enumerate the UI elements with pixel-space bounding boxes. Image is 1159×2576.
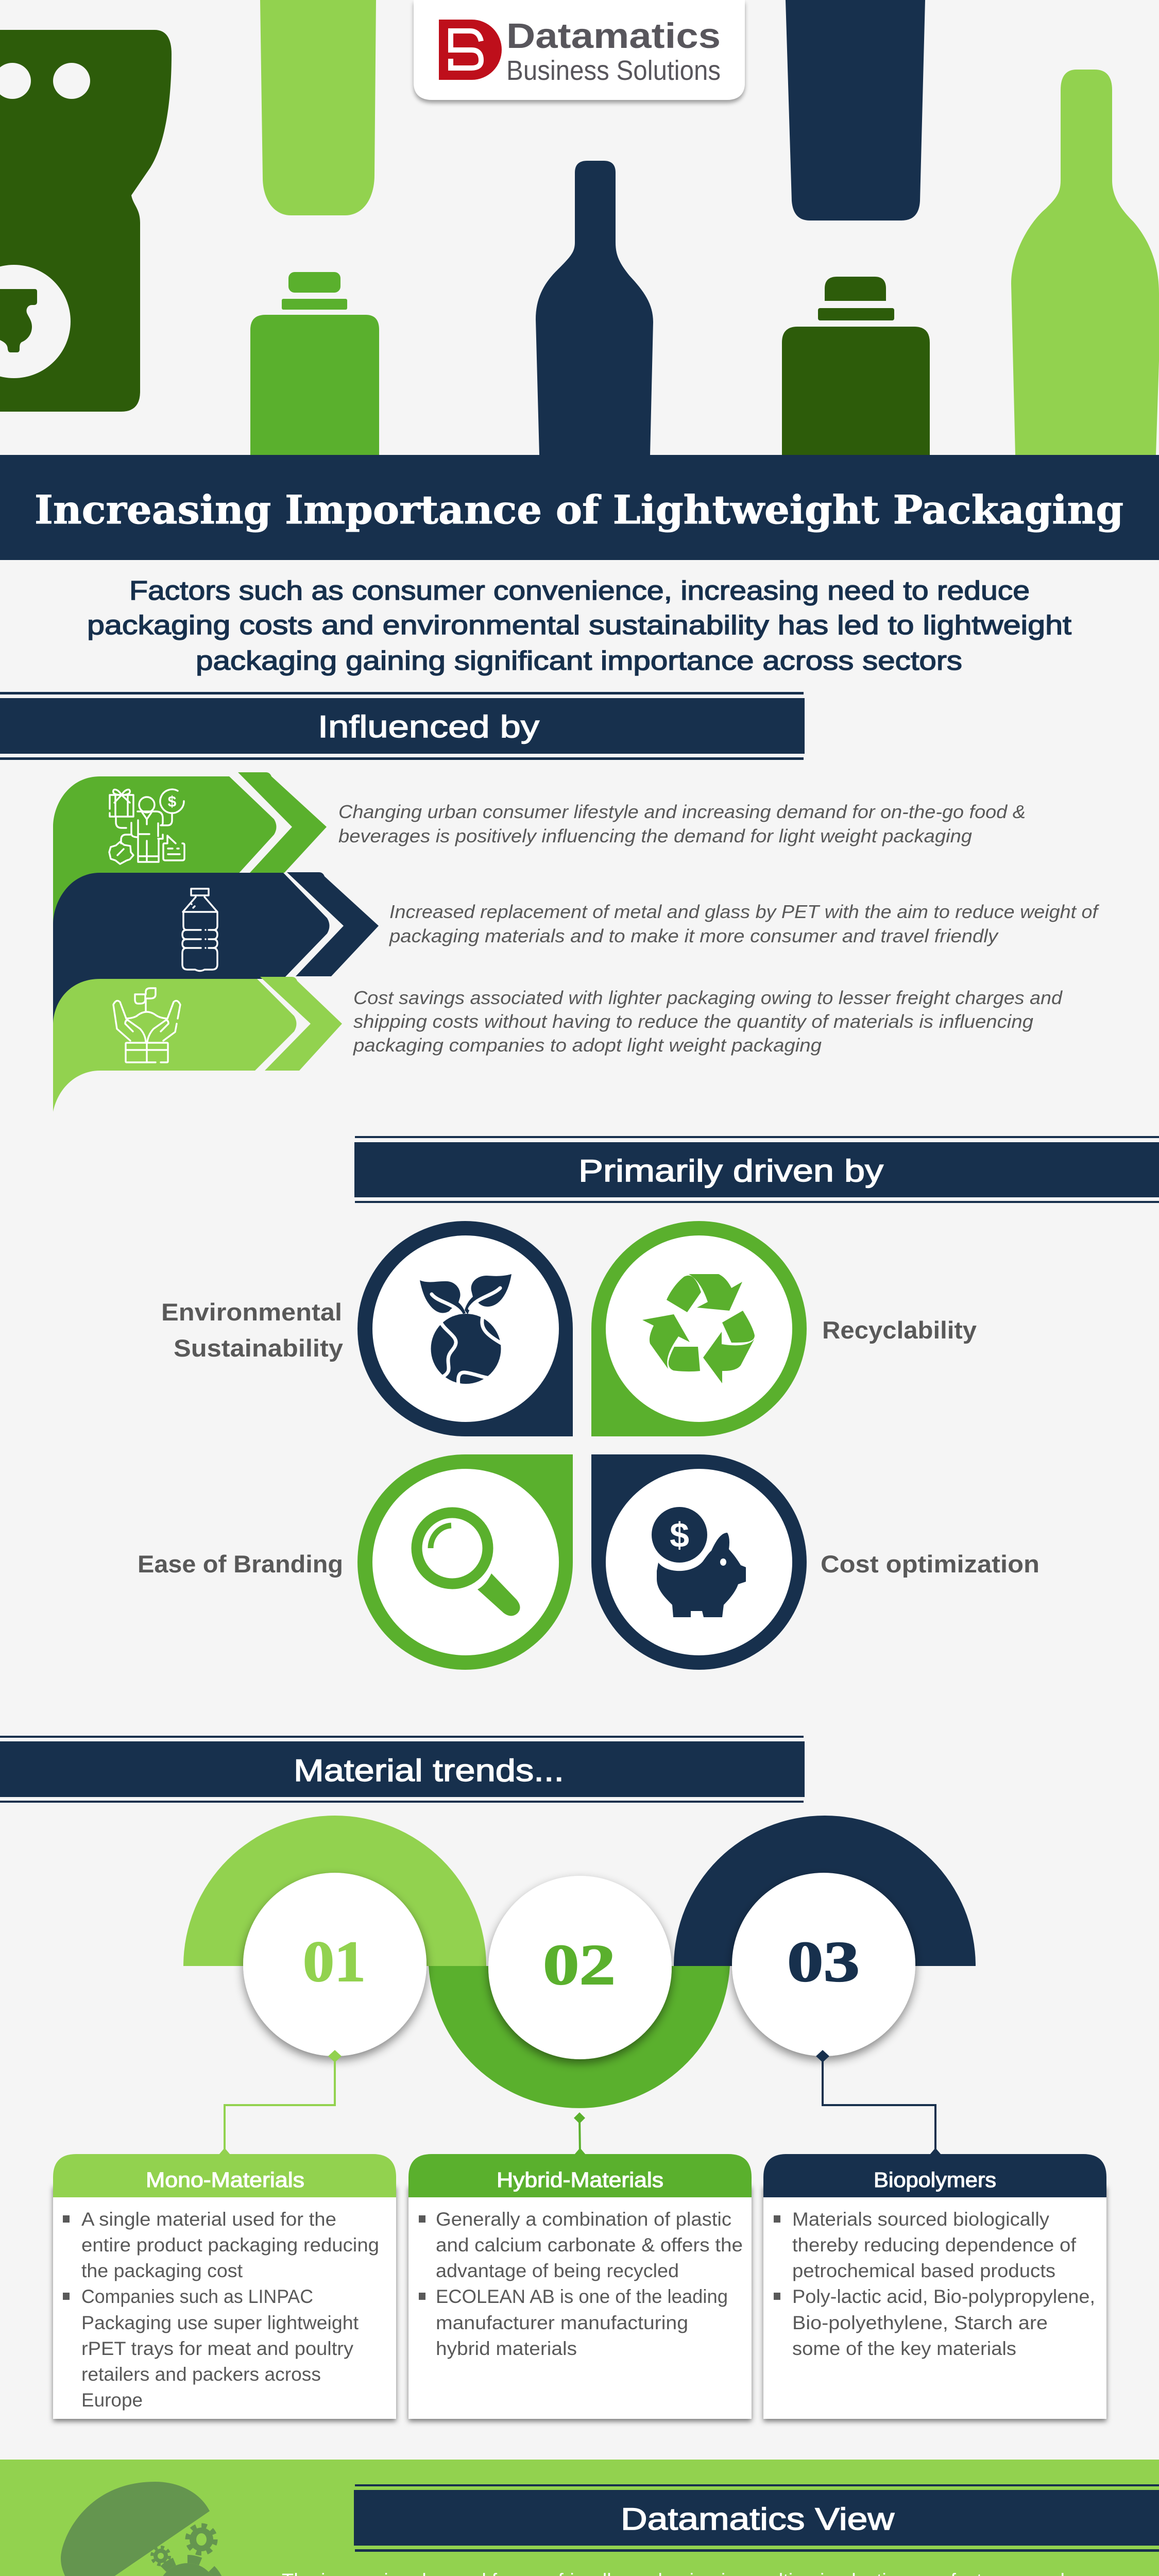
bullets: A single material used for the [81,2209,336,2230]
bullets: the packaging cost [81,2260,243,2281]
title band [0,455,1159,560]
label [161,1298,343,1362]
circle: 03 [732,1873,915,2056]
text: PET replacement: packaging materials and to make it more consumer and travel friendly [389,925,999,946]
circle: 02: 02 [543,1933,616,1997]
logo wordmark: Business Solutions [506,55,721,86]
card: mono-materials [53,2154,396,2419]
label: Sustainability [174,1334,343,1362]
bullets: some of the key materials [792,2338,1016,2359]
icon: globe with leaves [420,1274,512,1388]
icon: hands holding plant [113,988,180,1062]
arrow 3 light green [53,977,342,1112]
connector 01 [219,2050,342,2155]
bullets [63,2209,379,2411]
icon: plastic bottle [182,889,217,971]
driver: ease of branding [138,1454,573,1670]
heading: datamatics view: Datamatics View [621,2502,895,2536]
text: PET replacement: Increased replacement of metal and glass by PET with the aim to reduce weight of [389,901,1100,922]
bullets [419,2209,743,2359]
text: cost savings [353,987,1063,1056]
hero: packaging silhouettes [0,0,1159,455]
icon: green bottle [250,272,379,455]
connector 03 [816,2050,941,2155]
arrow 2 navy [53,872,379,1030]
icon: light green bottle [1011,70,1159,455]
section heading: primarily driven by: Primarily driven by [578,1154,883,1188]
icon: consumer with gift, money, discount and tag: $ [168,793,177,810]
bullets: Bio-polyethylene, Starch are [792,2312,1048,2333]
subtitle [87,576,1072,676]
label: Recyclability [822,1316,977,1344]
label: Cost optimization [821,1550,1039,1578]
arc: 03 navy [674,1816,976,1966]
icon: light green inverted bottle [260,0,376,215]
icon: piggy bank with coin: $ [670,1516,689,1555]
text: cost savings: Cost savings associated with lighter packaging owing to lesser freight charges and [353,987,1063,1008]
arrow 1 green [53,772,327,953]
icon: navy bottle [536,161,653,455]
logo wordmark: Datamatics [506,16,721,56]
circle: 01 [243,1873,427,2056]
bullets: and calcium carbonate & offers the [436,2234,743,2256]
arc: 02 green [429,1966,730,2108]
subtitle: packaging gaining significant importance across sectors [196,646,962,676]
section heading: material trends: Material trends... [294,1753,564,1788]
circle: 01: 01 [303,1930,366,1994]
panel: material trends wave [183,1816,976,2155]
card: mono-materials: Mono-Materials [146,2168,304,2192]
panel: influenced by arrows [53,772,1100,1112]
card: biopolymers [763,2154,1106,2419]
icon: logo mark [439,20,502,80]
icon: dark green bottle [782,277,930,455]
icon: recycle symbol [642,1274,755,1383]
circle: 02 [488,1876,672,2059]
connector 02 [574,2112,586,2155]
bullets: petrochemical based products [792,2260,1055,2281]
section heading: influenced by [0,692,805,760]
driver: environmental sustainability [161,1221,573,1436]
bullets: entire product packaging reducing [81,2234,379,2256]
circle: 03: 03 [787,1930,860,1994]
icon: dark green pouch [0,30,172,412]
bullets: hybrid materials [436,2338,577,2359]
logo wordmark [506,16,721,86]
text: lifestyle: beverages is positively influencing the demand for light weight packaging [338,825,972,846]
text: cost savings: shipping costs without having to reduce the quantity of materials is influencing [353,1011,1033,1032]
bullets: thereby reducing dependence of [792,2234,1077,2256]
icon: consumer with gift, money, discount and tag [109,789,184,864]
logo card [414,0,745,100]
panel: datamatics view [0,2460,1159,2576]
label: Ease of Branding [138,1550,343,1578]
bullets: Packaging use super lightweight [81,2312,359,2333]
icon: head with gears [61,2482,255,2576]
subtitle: Factors such as consumer convenience, increasing need to reduce [129,576,1030,606]
section heading: influenced by: Influenced by [318,709,539,744]
driver: cost optimization [591,1454,1039,1670]
bullets: Europe [81,2389,143,2411]
bullets: retailers and packers across [81,2364,321,2385]
title band: Increasing Importance of Lightweight Packaging [35,487,1123,533]
subtitle: packaging costs and environmental sustainability has led to lightweight [87,611,1072,640]
bullets: Poly-lactic acid, Bio-polypropylene, [792,2286,1095,2307]
text: lifestyle [338,801,1026,846]
arc: 01 light green [183,1816,486,1966]
section heading: material trends [0,1736,805,1803]
bullets: ECOLEAN AB is one of the leading [436,2286,728,2307]
label: Environmental [161,1298,342,1326]
card: hybrid-materials: Hybrid-Materials [497,2168,663,2192]
heading: datamatics view [354,2484,1159,2552]
text: lifestyle: Changing urban consumer lifestyle and increasing demand for on-the-go food & [338,801,1026,822]
text: cost savings: packaging companies to adopt light weight packaging [353,1035,822,1056]
section heading: primarily driven by [354,1136,1159,1203]
icon: magnifying glass [417,1513,520,1616]
card: biopolymers: Biopolymers [874,2168,996,2192]
bullets: Materials sourced biologically [792,2209,1050,2230]
bullets [774,2209,1095,2359]
icon: navy inverted bottle [786,0,925,221]
driver: recyclability [591,1221,977,1436]
card: hybrid-materials [408,2154,752,2419]
bullets: advantage of being recycled [436,2260,679,2281]
panel: primary drivers [138,1221,1039,1670]
bullets: Companies such as LINPAC [81,2286,313,2307]
text: PET replacement [389,901,1100,946]
icon: piggy bank with coin [652,1507,746,1617]
bullets: rPET trays for meat and poultry [81,2338,354,2359]
bullets: manufacturer manufacturing [436,2312,688,2333]
bullets: Generally a combination of plastic [436,2209,731,2230]
